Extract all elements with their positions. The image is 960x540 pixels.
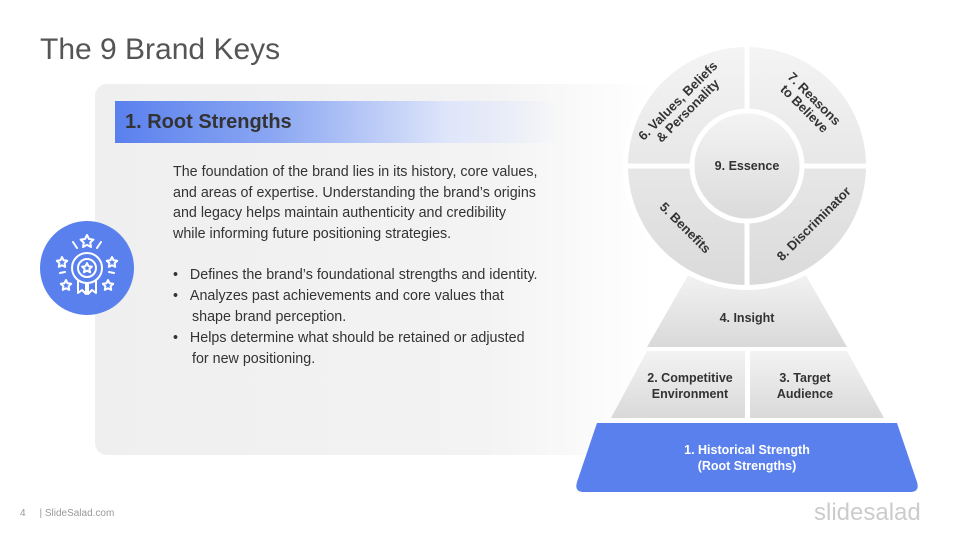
segment: 6. Values, Beliefs & Personality: 6. Values, Beliefs (635, 58, 720, 143)
pyramid tier: 1. Historical Strength: (Root Strengths) (698, 459, 796, 473)
bullet list: for new positioning. (192, 351, 315, 367)
pyramid tier: 3. Target Audience: Audience (777, 387, 833, 401)
pyramid tier: 1. Historical Strength: 1. Historical Strength (684, 443, 810, 457)
pyramid tier: 2. Competitive Environment: 2. Competitive (647, 371, 733, 385)
center: 9. Essence: 9. Essence (715, 159, 779, 173)
pyramid tier: 1. Historical Strength (576, 423, 918, 492)
segment: 8. Discriminator: 8. Discriminator (774, 184, 854, 264)
footer: page number: 4 | SlideSalad.com (20, 508, 114, 519)
segment: 5. Benefits: 5. Benefits (657, 199, 714, 256)
pyramid tier: 4. Insight: 4. Insight (720, 311, 775, 325)
text block: description: and areas of expertise. Understanding the brand’s origins (173, 184, 536, 200)
heading text: 1. Root Strengths (125, 111, 292, 133)
heading bar: Root Strengths (115, 101, 560, 143)
title: The 9 Brand Keys (40, 33, 280, 66)
text block: description: while informing future positioning strategies. (173, 226, 451, 242)
bullet list: • Analyzes past achievements and core values that (173, 288, 504, 304)
bullet list: • Helps determine what should be retained or adjusted (173, 330, 525, 346)
pyramid tier: 2. Competitive Environment: Environment (652, 387, 729, 401)
pyramid tier: 3. Target Audience: 3. Target (779, 371, 831, 385)
icon: award badge with stars (40, 221, 134, 315)
text block: description: The foundation of the brand lies in its history, core values, (173, 164, 538, 180)
panel: content card (95, 84, 655, 455)
footer: logo: slidesalad (814, 499, 921, 526)
pyramid tier: 3. Target Audience (750, 351, 884, 418)
bullet list (173, 267, 538, 367)
pyramid tier: 2. Competitive Environment (611, 351, 745, 418)
text block: description: and legacy helps maintain authenticity and credibility (173, 205, 506, 221)
bullet list: shape brand perception. (192, 309, 346, 325)
segment: 7. Reasons to Believe: 7. Reasons (785, 69, 844, 128)
segment: 6. Values, Beliefs & Personality: & Personality (653, 75, 723, 145)
segment: 7. Reasons to Believe: to Believe (777, 82, 831, 136)
pyramid tier: 4. Insight (647, 272, 847, 347)
text block: description (173, 164, 538, 242)
circle wheel (623, 42, 871, 290)
bullet list: • Defines the brand’s foundational strengths and identity. (173, 267, 538, 283)
